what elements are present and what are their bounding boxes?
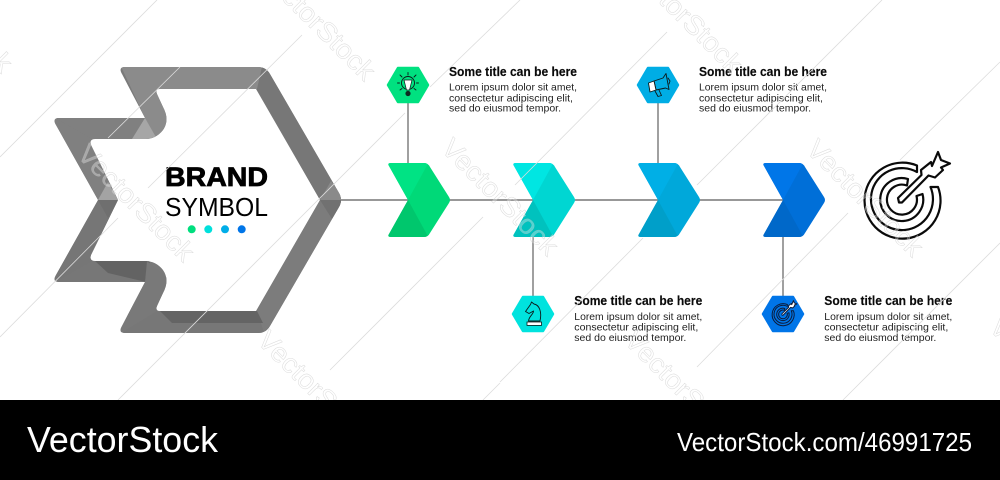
text block 3: consectetur adipiscing elit, bbox=[699, 93, 823, 104]
text block 3: Some title can be here bbox=[699, 64, 827, 79]
text block 4: Some title can be here bbox=[824, 293, 952, 308]
text block 1: sed do eiusmod tempor. bbox=[449, 104, 561, 115]
brand title bbox=[165, 162, 268, 222]
icon: large target with arrow bbox=[865, 152, 950, 239]
text block 2: consectetur adipiscing elit, bbox=[574, 322, 698, 334]
watermark text: VectorStock bbox=[252, 325, 381, 454]
footer band: VectorStock bbox=[27, 419, 219, 460]
brand title: BRAND bbox=[165, 162, 268, 192]
brand colour dots bbox=[188, 225, 246, 233]
text block 3 bbox=[699, 64, 827, 115]
text block 4: Lorem ipsum dolor sit amet, bbox=[824, 312, 952, 323]
text block 1: Lorem ipsum dolor sit amet, bbox=[449, 83, 577, 94]
hexagon icon: megaphone bbox=[638, 68, 678, 102]
hexagon icon: chess knight bbox=[513, 297, 553, 331]
text block 1: Some title can be here bbox=[449, 64, 577, 79]
main connector line bbox=[340, 199, 820, 201]
chevron 1 green bbox=[388, 163, 450, 237]
watermark text: VectorStock bbox=[72, 139, 201, 268]
watermark text: VectorStock bbox=[801, 134, 930, 263]
text block 2: Some title can be here bbox=[574, 293, 702, 308]
hexagon icon: small target bbox=[763, 297, 803, 331]
watermark text: VectorStock bbox=[619, 325, 748, 454]
text block 3: sed do eiusmod tempor. bbox=[699, 104, 811, 115]
text block 1 bbox=[449, 64, 577, 115]
footer band: VectorStock.com/46991725 bbox=[677, 427, 972, 457]
text block 4 bbox=[824, 293, 952, 344]
brand title: SYMBOL bbox=[165, 192, 268, 222]
text block 4: consectetur adipiscing elit, bbox=[824, 322, 948, 334]
text block 4: sed do eiusmod tempor. bbox=[824, 333, 936, 344]
text block 2 bbox=[574, 293, 702, 344]
chevron 4 blue bbox=[763, 163, 825, 237]
text block 1: consectetur adipiscing elit, bbox=[449, 93, 573, 104]
text block 2: sed do eiusmod tempor. bbox=[574, 333, 686, 344]
brand arrow frame bbox=[50, 60, 350, 340]
chevron 3 light blue bbox=[638, 163, 700, 237]
footer band bbox=[0, 400, 1000, 480]
text block 2: Lorem ipsum dolor sit amet, bbox=[574, 312, 702, 323]
watermark text: VectorStock bbox=[436, 133, 565, 262]
connector stems bbox=[408, 100, 783, 298]
text block 3: Lorem ipsum dolor sit amet, bbox=[699, 83, 827, 94]
chevron 2 cyan bbox=[513, 163, 575, 237]
hexagon icon: light bulb bbox=[388, 68, 428, 102]
